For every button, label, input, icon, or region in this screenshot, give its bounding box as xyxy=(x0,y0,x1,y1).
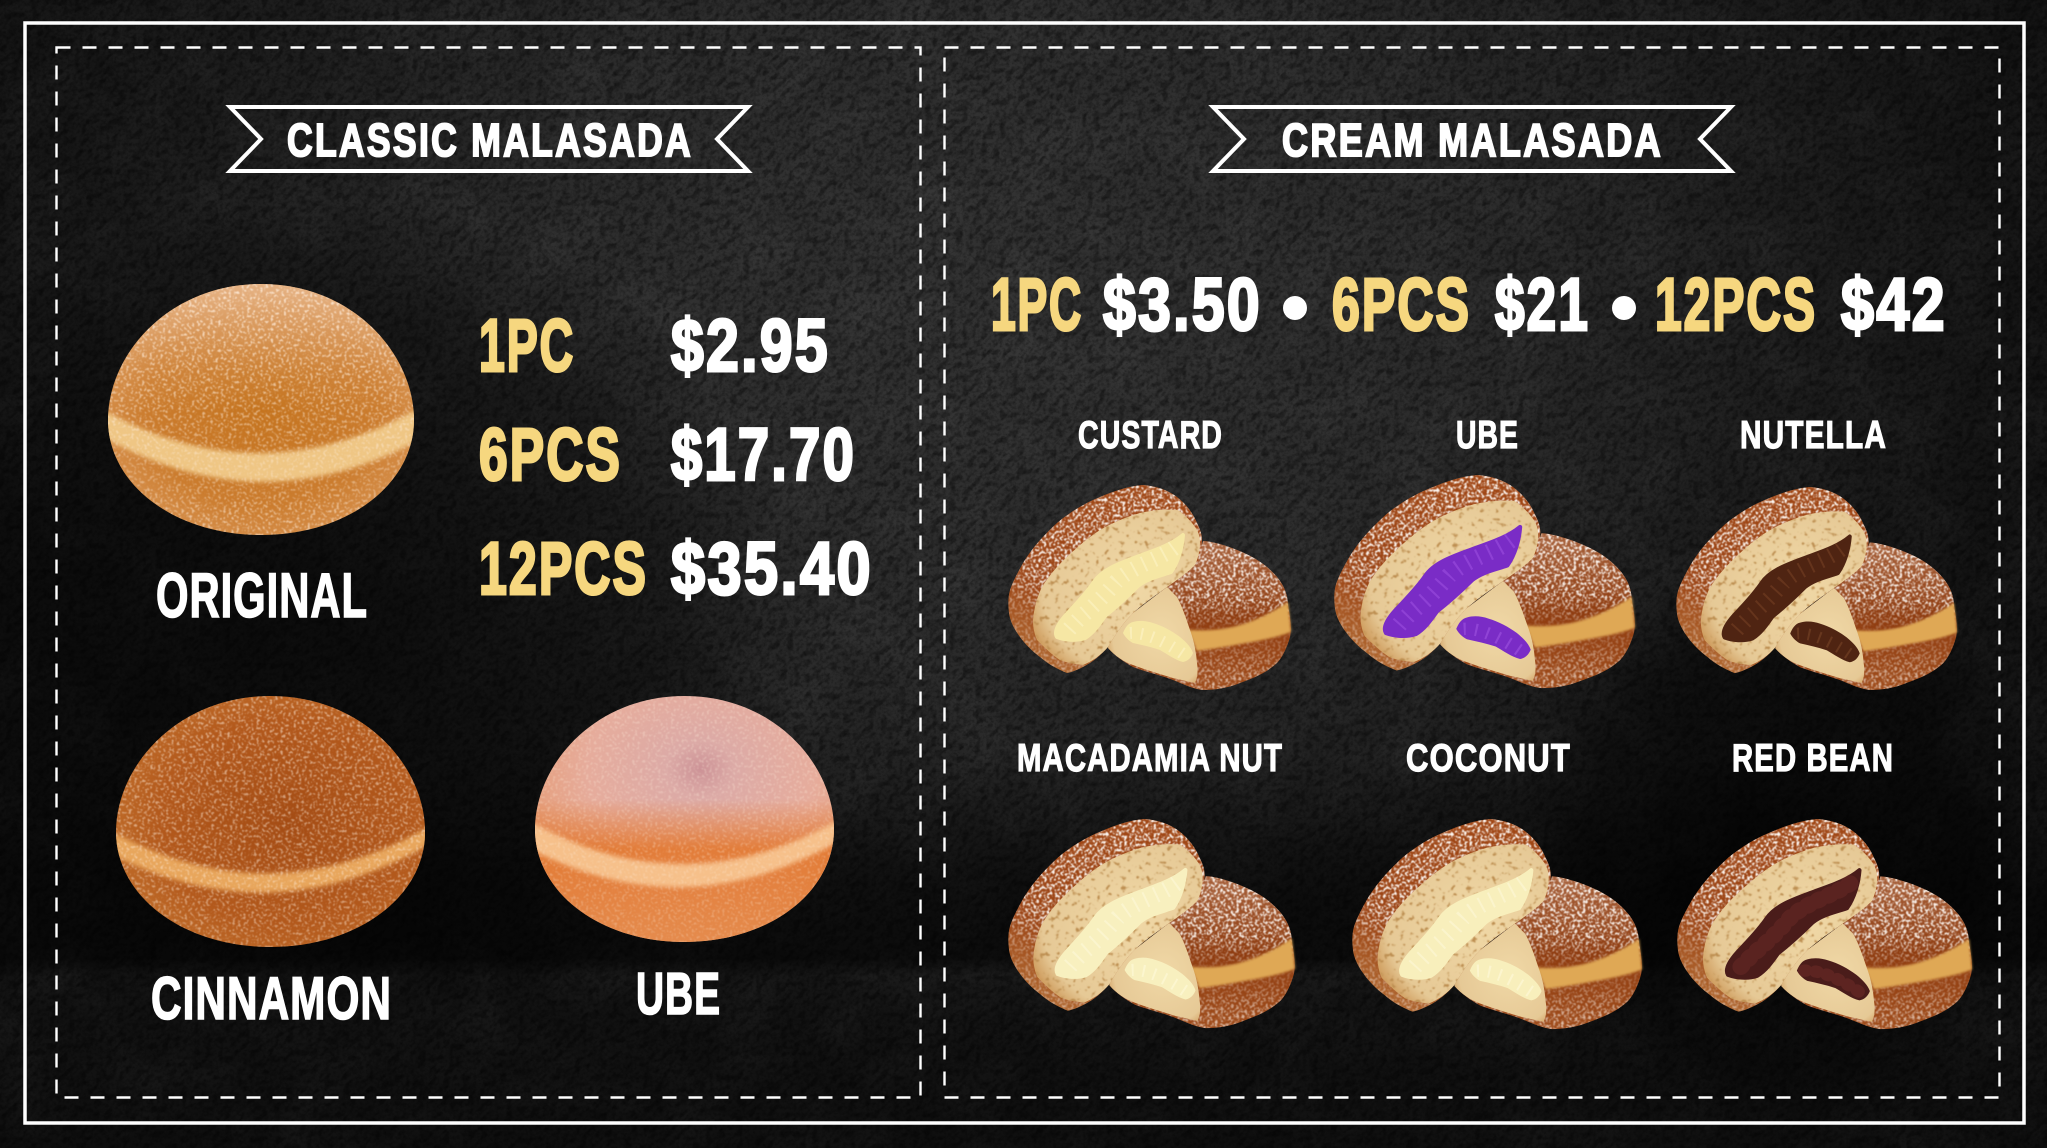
flavor label: red bean: RED BEAN xyxy=(1732,737,1894,780)
price list: classic xyxy=(479,304,873,610)
flavor label: custard: CUSTARD xyxy=(1078,414,1223,457)
heading banner: cream malasada xyxy=(1213,107,1731,171)
price list: classic: $35.40 xyxy=(671,527,873,610)
price list: classic: 12PCS xyxy=(479,527,648,610)
flavor label: nutella: NUTELLA xyxy=(1740,414,1887,457)
dashed border: classic panel xyxy=(56,48,920,1098)
donut: cinnamon xyxy=(111,694,430,950)
donut: original xyxy=(103,282,419,538)
price row: cream: 1PC xyxy=(991,263,1083,346)
price list: classic: 6PCS xyxy=(479,413,622,496)
price row: cream: $3.50 xyxy=(1103,263,1262,346)
flavor label: coconut: COCONUT xyxy=(1406,737,1571,780)
panel: cream malasada xyxy=(944,48,2000,1098)
donut: ube xyxy=(530,694,839,945)
price list: classic: $17.70 xyxy=(671,413,856,496)
price row: cream: 12PCS xyxy=(1655,263,1817,346)
label: cinnamon: CINNAMON xyxy=(151,965,392,1032)
heading banner: cream malasada: CREAM MALASADA xyxy=(1282,114,1663,166)
price list: classic: $2.95 xyxy=(671,304,830,387)
price row: cream: $21 xyxy=(1495,263,1590,346)
price row: cream: 6PCS xyxy=(1332,263,1471,346)
heading banner: classic malasada xyxy=(230,107,748,171)
price row: cream: $42 xyxy=(1841,263,1947,346)
label: ube: UBE xyxy=(636,961,721,1027)
price list: classic: 1PC xyxy=(479,304,575,387)
flavor label: ube: UBE xyxy=(1456,414,1519,457)
flavor donut: coconut xyxy=(1352,819,1642,1029)
dashed border: cream panel xyxy=(944,48,2000,1098)
flavor donut: nutella xyxy=(1676,487,1957,690)
label: original: ORIGINAL xyxy=(156,561,368,631)
panel: classic malasada xyxy=(56,48,920,1098)
flavor donut: macadamia nut xyxy=(1008,819,1295,1028)
price row: cream xyxy=(991,263,1947,346)
flavor label: macadamia nut: MACADAMIA NUT xyxy=(1017,737,1283,780)
flavor donut: red bean xyxy=(1677,819,1972,1029)
heading banner: classic malasada: CLASSIC MALASADA xyxy=(287,114,693,166)
flavor donut: ube xyxy=(1334,475,1635,688)
flavor donut: custard xyxy=(1008,485,1291,690)
